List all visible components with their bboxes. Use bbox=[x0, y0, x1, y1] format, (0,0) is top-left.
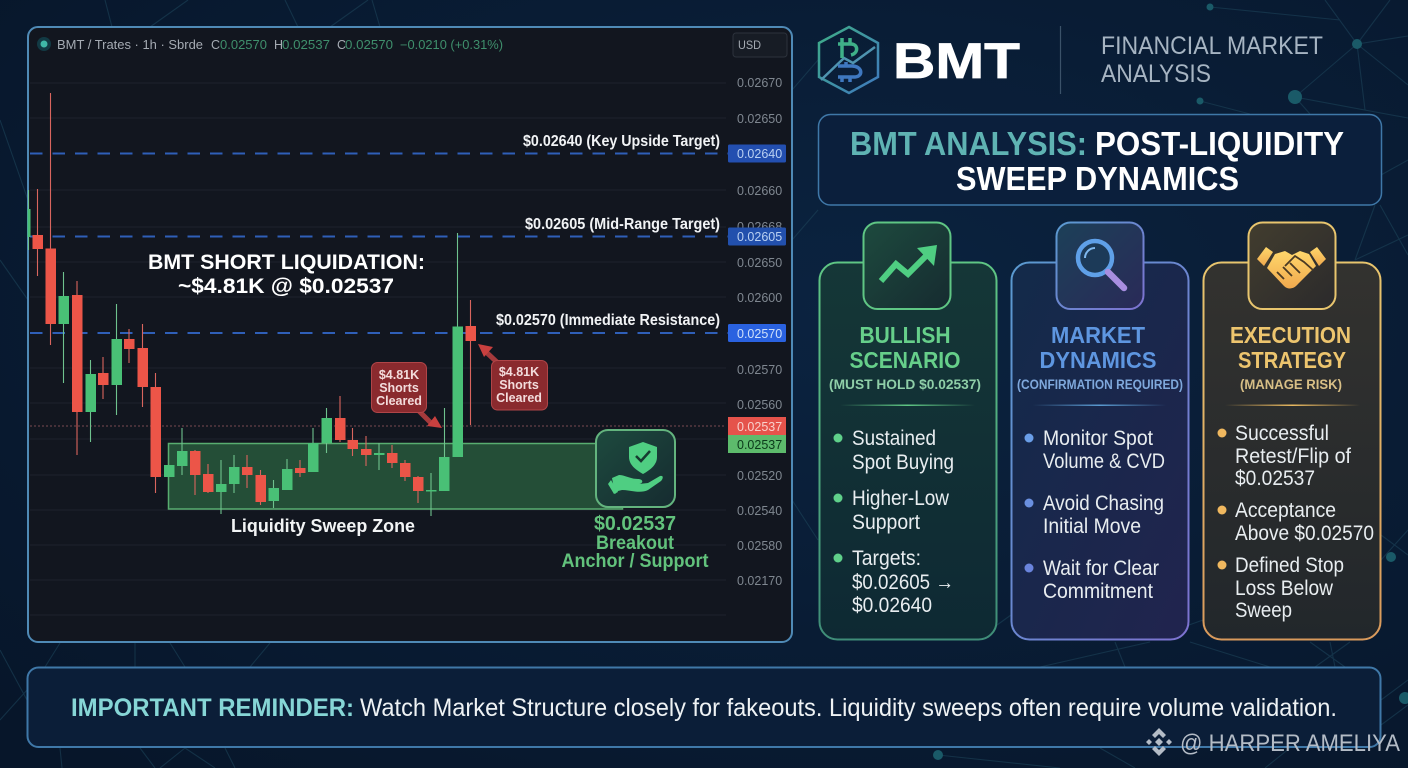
title text: SWEEP DYNAMICS bbox=[956, 160, 1239, 197]
price axis labels: 0.02560 bbox=[737, 398, 782, 412]
brand name: BMT bbox=[893, 33, 1020, 89]
card heading bbox=[1017, 322, 1183, 392]
price tag: 0.02605: 0.02605 bbox=[737, 230, 782, 244]
currency selector bbox=[733, 33, 787, 57]
reminder text: IMPORTANT REMINDER: bbox=[71, 694, 354, 722]
support label: Anchor / Support bbox=[562, 551, 709, 572]
bullet list: Successful bbox=[1235, 422, 1329, 445]
price axis labels: 0.02540 bbox=[737, 504, 782, 518]
price axis labels: 0.02668 bbox=[737, 220, 782, 234]
callout: shorts cleared right: Shorts bbox=[499, 378, 539, 392]
support dotted line bbox=[30, 425, 726, 427]
chart header ticker: H bbox=[274, 38, 283, 52]
bullet list: $0.02640 bbox=[852, 594, 932, 617]
chart headline: short liquidation: BMT SHORT LIQUIDATION: bbox=[148, 251, 425, 274]
price axis labels: 0.02170 bbox=[737, 574, 782, 588]
divider bbox=[840, 404, 975, 406]
price axis labels: 0.02650 bbox=[737, 256, 782, 270]
title text: BMT ANALYSIS: bbox=[850, 125, 1087, 162]
chart header ticker: −0.0210 (+0.31%) bbox=[400, 38, 503, 52]
price tag: 0.02640: 0.02640 bbox=[737, 147, 782, 161]
price axis labels bbox=[737, 76, 782, 588]
chart header ticker: 0.02570 bbox=[220, 38, 267, 52]
panel: bullish scenario bbox=[820, 222, 996, 640]
card heading: EXECUTION bbox=[1230, 322, 1351, 348]
card heading: (MANAGE RISK) bbox=[1240, 377, 1342, 392]
price axis labels: 0.02570 bbox=[737, 363, 782, 377]
price grid lines bbox=[30, 83, 726, 615]
card heading bbox=[829, 322, 981, 392]
bullet list: Monitor Spot bbox=[1043, 427, 1153, 450]
price axis labels: 0.02600 bbox=[737, 291, 782, 305]
price tag: 0.02570 bbox=[728, 324, 786, 342]
bullet list: Targets: bbox=[852, 547, 921, 570]
panel: trading chart bbox=[28, 27, 792, 642]
card heading: MARKET bbox=[1051, 322, 1145, 348]
support label: Breakout bbox=[596, 533, 675, 554]
divider bbox=[1225, 404, 1360, 406]
chart header ticker bbox=[37, 37, 503, 52]
icon: rising arrow bbox=[864, 222, 950, 309]
chart header ticker: C bbox=[337, 38, 346, 52]
card heading: (CONFIRMATION REQUIRED) bbox=[1017, 377, 1183, 392]
price tag: 0.02605 bbox=[728, 228, 786, 246]
price tag: 0.02570: 0.02570 bbox=[737, 327, 782, 341]
icon: shield in hand bbox=[596, 430, 675, 507]
price tag: red 0.02537: 0.02537 bbox=[737, 420, 782, 434]
card heading: BULLISH bbox=[860, 322, 950, 348]
bullet list: Sustained bbox=[852, 427, 936, 450]
icon: magnifying glass bbox=[1056, 222, 1144, 309]
bullet list: Loss Below bbox=[1235, 577, 1334, 600]
bullet list: Commitment bbox=[1043, 580, 1153, 603]
currency selector: USD bbox=[738, 38, 761, 52]
price axis labels: 0.02520 bbox=[737, 469, 782, 483]
callout: shorts cleared left: Cleared bbox=[376, 394, 422, 408]
price axis labels: 0.02670 bbox=[737, 76, 782, 90]
level label: key upside target: $0.02640 (Key Upside Target) bbox=[523, 133, 720, 150]
chart headline: short liquidation: ~$4.81K @ $0.02537 bbox=[178, 275, 394, 298]
tagline: FINANCIAL MARKET bbox=[1101, 32, 1323, 60]
bullet list: Above $0.02570 bbox=[1235, 522, 1374, 545]
level label: immediate resistance: $0.02570 (Immediate Resistance) bbox=[496, 312, 720, 329]
bullet list: Initial Move bbox=[1043, 515, 1141, 538]
callout: shorts cleared right: $4.81K bbox=[499, 365, 539, 379]
chart header ticker: 0.02537 bbox=[282, 38, 330, 52]
zone label: Liquidity Sweep Zone bbox=[231, 516, 415, 536]
card heading: SCENARIO bbox=[850, 347, 960, 373]
callout: shorts cleared left bbox=[372, 362, 442, 428]
title text: POST-LIQUIDITY bbox=[1095, 125, 1344, 162]
callout: shorts cleared right: Cleared bbox=[496, 391, 542, 405]
price tag: green 0.02537: 0.02537 bbox=[737, 438, 782, 452]
price tag: red 0.02537 bbox=[728, 417, 786, 435]
bullet list: Volume & CVD bbox=[1043, 450, 1165, 473]
bullet list: $0.02605 → bbox=[852, 571, 954, 594]
icon: handshake bbox=[1248, 222, 1336, 309]
chart headline: short liquidation bbox=[148, 251, 425, 298]
liquidity sweep zone bbox=[168, 444, 622, 509]
bullet list: Sweep bbox=[1235, 599, 1292, 622]
bullet list: Spot Buying bbox=[852, 451, 954, 474]
chart header ticker: C bbox=[211, 38, 220, 52]
level label: mid-range target: $0.02605 (Mid-Range Target) bbox=[525, 216, 720, 233]
candlestick chart bbox=[28, 93, 476, 516]
card heading: STRATEGY bbox=[1238, 347, 1346, 373]
tagline bbox=[1101, 32, 1323, 88]
resistance and target lines bbox=[30, 154, 728, 333]
bullet list: Defined Stop bbox=[1235, 554, 1344, 577]
card heading: (MUST HOLD $0.02537) bbox=[829, 377, 981, 392]
panel: execution strategy bbox=[1204, 222, 1380, 640]
price tag: 0.02640 bbox=[728, 144, 786, 162]
bullet list: Wait for Clear bbox=[1043, 557, 1159, 580]
bullet list: $0.02537 bbox=[1235, 467, 1315, 490]
tagline: ANALYSIS bbox=[1101, 60, 1211, 88]
bullet list bbox=[1218, 422, 1374, 622]
reminder text: Watch Market Structure closely for fakeouts. Liquidity sweeps often require volume validation. bbox=[360, 694, 1337, 722]
bullet list bbox=[1024, 427, 1165, 603]
header divider bbox=[1060, 26, 1062, 94]
bullet list: Avoid Chasing bbox=[1043, 492, 1164, 515]
chart header ticker: BMT / Trates · 1h · Sbrde bbox=[57, 38, 203, 52]
bullet list: Acceptance bbox=[1235, 499, 1336, 522]
logo: BMT hexagon bbox=[819, 27, 878, 93]
panel: important reminder bbox=[28, 668, 1380, 747]
chart header ticker: 0.02570 bbox=[345, 38, 393, 52]
support label bbox=[562, 513, 709, 572]
support label: $0.02537 bbox=[594, 513, 676, 535]
title panel bbox=[818, 114, 1382, 205]
price axis labels: 0.02580 bbox=[737, 539, 782, 553]
callout: shorts cleared left: Shorts bbox=[379, 381, 419, 395]
bullet list bbox=[834, 427, 954, 617]
panel: market dynamics bbox=[1012, 222, 1188, 640]
title text bbox=[850, 125, 1344, 197]
bullet list: Retest/Flip of bbox=[1235, 445, 1351, 468]
price tag: green 0.02537 bbox=[728, 435, 786, 453]
callout: shorts cleared left: $4.81K bbox=[379, 368, 419, 382]
bullet list: Higher-Low bbox=[852, 487, 950, 510]
callout: shorts cleared right bbox=[478, 344, 548, 410]
card heading bbox=[1230, 322, 1351, 392]
divider bbox=[1033, 404, 1166, 406]
price axis labels: 0.02660 bbox=[737, 184, 782, 198]
card heading: DYNAMICS bbox=[1040, 347, 1156, 373]
bullet list: Support bbox=[852, 511, 920, 534]
price axis labels: 0.02650 bbox=[737, 112, 782, 126]
